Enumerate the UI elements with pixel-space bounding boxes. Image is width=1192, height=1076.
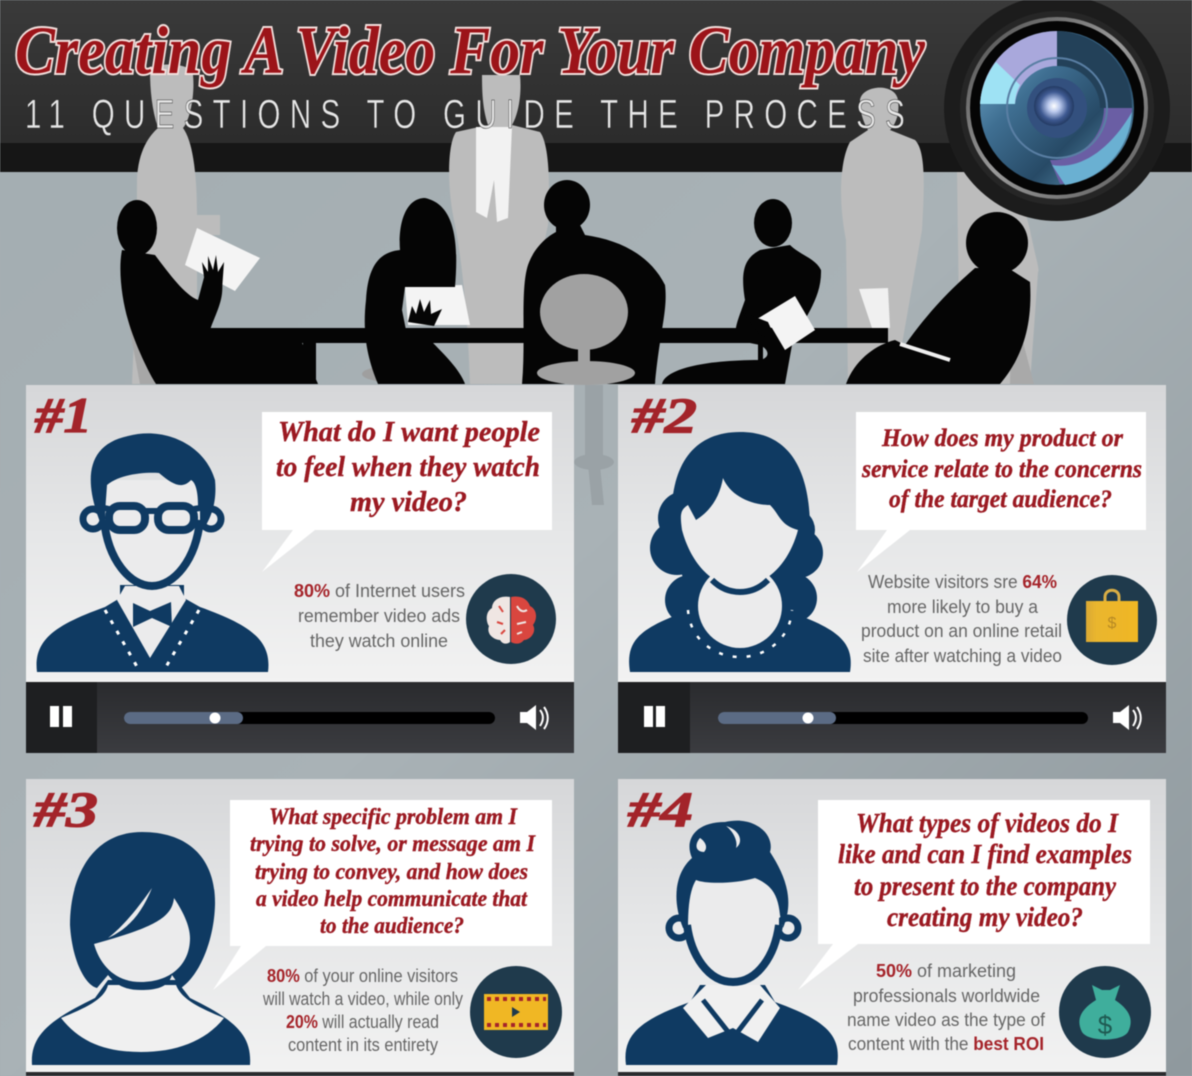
avatar: man with glasses (37, 433, 268, 672)
statistic text: Website visitors sre 64% (868, 572, 1057, 592)
question text (250, 804, 536, 938)
number 1: #1 (34, 387, 92, 443)
icon: brain (466, 574, 556, 664)
statistic text: 80% of your online visitors (267, 966, 458, 986)
media control bar strip (618, 1072, 1166, 1076)
question text: to present to the company (854, 871, 1117, 901)
speech bubble (856, 412, 1146, 572)
seated silhouette: left person (117, 200, 318, 384)
question text: How does my product or (881, 425, 1123, 452)
question text (276, 417, 540, 518)
icon: film strip (470, 966, 562, 1058)
statistic text (847, 961, 1046, 1054)
camera lens (944, 0, 1170, 221)
question text: service relate to the concerns (861, 456, 1142, 483)
panel #3 (26, 779, 574, 1076)
question text: What types of videos do I (856, 808, 1119, 838)
number 2: #2 (631, 387, 697, 443)
statistic text: content in its entirety (288, 1035, 438, 1055)
header band (0, 0, 1192, 172)
question text: to feel when they watch (276, 452, 540, 483)
office chair (537, 274, 635, 385)
media control bar (26, 682, 574, 753)
seated silhouette: woman with long hair (362, 198, 470, 384)
number 3: #3 (33, 781, 98, 837)
seated silhouette: center person (522, 180, 666, 384)
statistic text: 50% of marketing (876, 961, 1016, 981)
question text (838, 808, 1132, 932)
standing grey silhouettes (132, 65, 1039, 384)
statistic text (861, 572, 1062, 666)
statistic text: site after watching a video (863, 646, 1062, 666)
media control bar (618, 682, 1166, 753)
subtitle: 11 QUESTIONS TO GUIDE THE PROCESS (25, 91, 905, 137)
avatar: woman with curly hair (629, 432, 851, 672)
icon: money bag (1059, 966, 1151, 1058)
statistic text: product on an online retail (861, 621, 1062, 641)
statistic text (262, 966, 463, 1055)
statistic text (294, 581, 465, 651)
question text: of the target audience? (889, 486, 1112, 513)
avatar: woman with hair bun (625, 821, 838, 1065)
speech bubble (262, 412, 552, 572)
panel 4 card (618, 779, 1166, 1072)
avatar: woman with bob hair (32, 832, 250, 1065)
statistic text: more likely to buy a (887, 597, 1039, 617)
title: Creating A Video For Your Company (15, 12, 926, 88)
speech bubble (798, 800, 1150, 990)
meeting table (210, 328, 888, 384)
statistic text: remember video ads (298, 606, 460, 626)
statistic text: they watch online (310, 631, 448, 651)
question text: What do I want people (278, 417, 540, 448)
statistic text: will watch a video, while only (262, 989, 463, 1009)
question text: my video? (350, 487, 467, 518)
statistic text: 20% will actually read (286, 1012, 439, 1032)
number 4: #4 (627, 781, 693, 837)
panel #1 (26, 385, 574, 753)
question text: What specific problem am I (269, 804, 518, 829)
chair stem between panels (574, 385, 614, 505)
icon: money bag: $ (1098, 1010, 1113, 1040)
question text: creating my video? (887, 902, 1083, 932)
media control bar strip (26, 1072, 574, 1076)
question text: to the audience? (320, 913, 464, 938)
statistic text: name video as the type of (847, 1010, 1046, 1030)
question text: like and can I find examples (838, 839, 1132, 869)
question text (861, 425, 1142, 513)
statistic text: professionals worldwide (853, 986, 1040, 1006)
panel 3 card (26, 779, 574, 1072)
icon: shopping bag: $ (1108, 615, 1117, 632)
question text: trying to solve, or message am I (250, 831, 536, 856)
seated silhouette: woman with laptop (846, 212, 1034, 384)
panel #2 (618, 385, 1166, 753)
statistic text: content with the best ROI (848, 1034, 1044, 1054)
panel 2 card (618, 385, 1166, 682)
seated silhouette: right-center person (662, 199, 821, 384)
panel 1 card (26, 385, 574, 682)
statistic text: 80% of Internet users (294, 581, 465, 601)
panel #4 (618, 779, 1166, 1076)
question text: trying to convey, and how does (255, 859, 528, 884)
white shirt highlights (476, 127, 512, 222)
icon: shopping bag (1067, 575, 1157, 665)
speech bubble (213, 800, 552, 990)
question text: a video help communicate that (256, 886, 528, 911)
